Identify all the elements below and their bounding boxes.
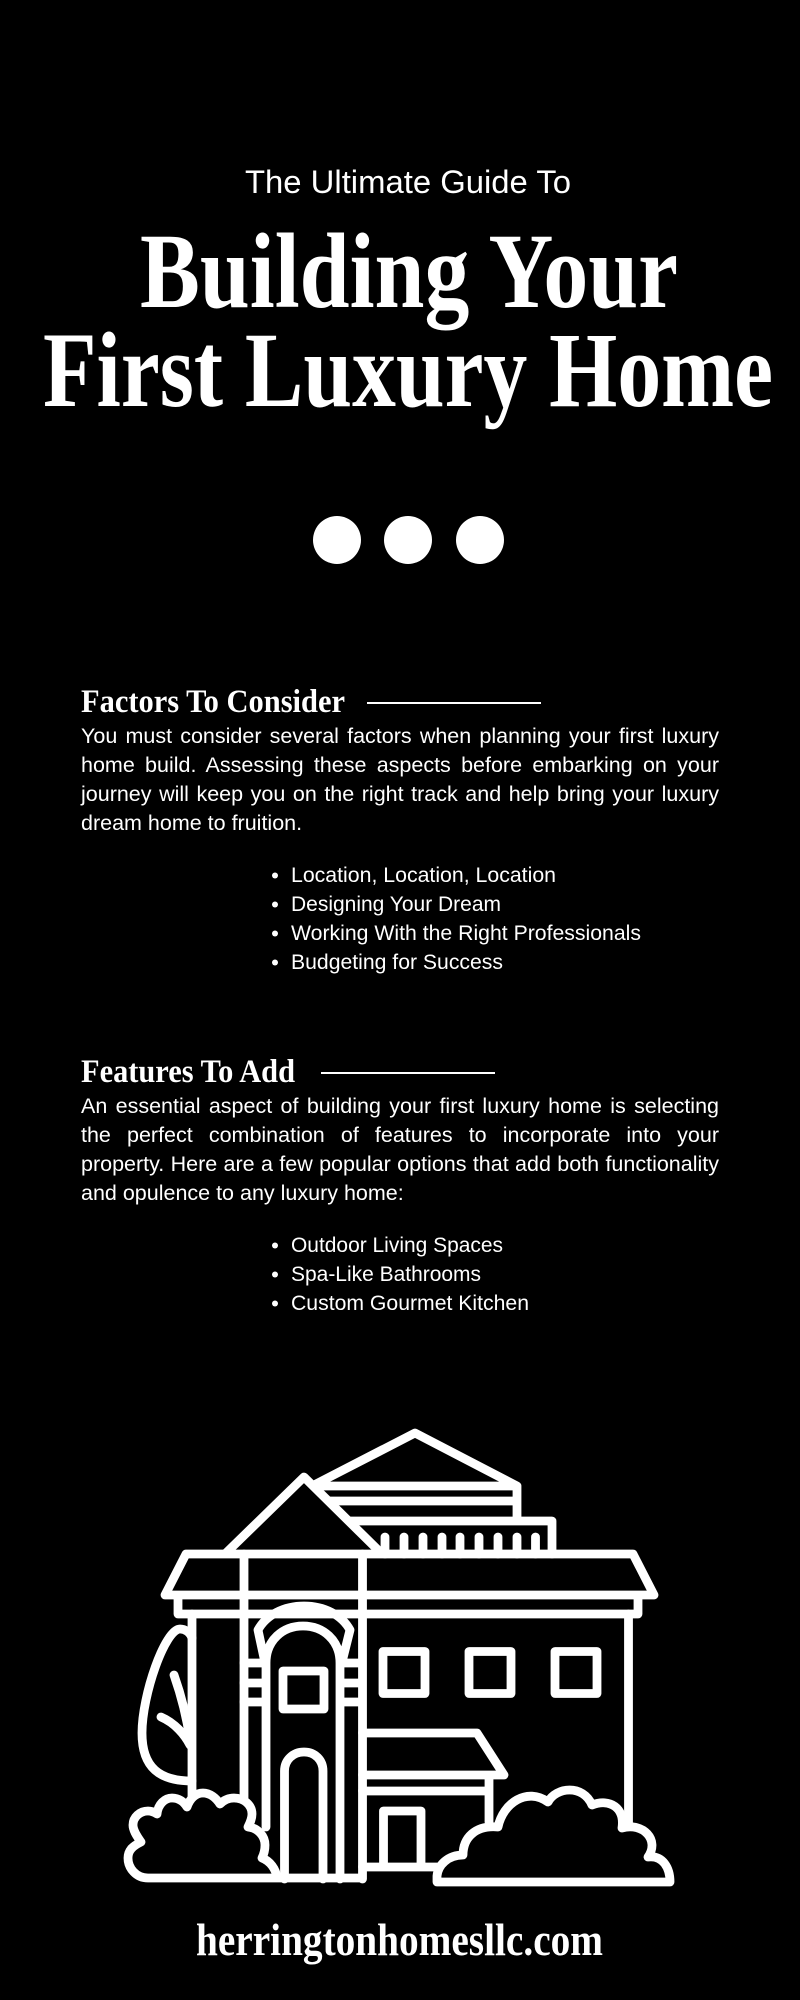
tower door: [284, 1752, 323, 1879]
footer website: herringtonhomesllc.com: [196, 1914, 603, 1965]
title: [43, 220, 773, 430]
tree: [142, 1629, 192, 1781]
text block: factors intro: journey will keep you on the right track and help bring your luxury: [81, 782, 719, 806]
tower arch: [244, 1606, 362, 1879]
main roof and eave: [165, 1554, 654, 1614]
text block: features intro: An essential aspect of building your first luxury home is selecting: [81, 1094, 719, 1118]
right bush: [437, 1790, 670, 1882]
heading: factors to consider: Factors To Consider: [81, 684, 345, 720]
list: features: [272, 1233, 529, 1315]
text block: features intro: [81, 1094, 719, 1205]
icon: luxury house: [124, 1428, 674, 1886]
text block: factors intro: [80, 724, 719, 835]
list: factors: Location, Location, Location: [291, 863, 556, 887]
upper windows: [383, 1652, 597, 1694]
text block: features intro: property. Here are a few popular options that add both functionality: [81, 1152, 719, 1176]
list: features: Custom Gourmet Kitchen: [291, 1291, 529, 1315]
list: factors: Designing Your Dream: [291, 892, 501, 916]
list: factors: [272, 863, 641, 974]
list: factors: Working With the Right Professionals: [291, 921, 641, 945]
text block: features intro: and opulence to any luxury home:: [81, 1181, 404, 1205]
text block: factors intro: dream home to fruition.: [81, 811, 302, 835]
roof balusters: [385, 1537, 536, 1554]
subtitle: The Ultimate Guide To: [245, 164, 571, 200]
list: features: Spa-Like Bathrooms: [291, 1262, 481, 1286]
three dots: [313, 516, 504, 564]
list: features: Outdoor Living Spaces: [291, 1233, 503, 1257]
upper roof: [316, 1433, 552, 1554]
text block: factors intro: You must consider several factors when planning your first luxury: [81, 724, 719, 748]
front gable: [226, 1477, 381, 1553]
text block: features intro: the perfect combination of features to incorporate into your: [81, 1123, 719, 1147]
tower window: [283, 1671, 324, 1709]
text block: factors intro: home build. Assessing these aspects before embarking on your: [81, 753, 719, 777]
left bush: [128, 1793, 362, 1878]
porch: [362, 1733, 504, 1867]
walls: [192, 1554, 628, 1879]
list: factors: Budgeting for Success: [291, 950, 503, 974]
heading: features to add: Features To Add: [81, 1054, 295, 1090]
